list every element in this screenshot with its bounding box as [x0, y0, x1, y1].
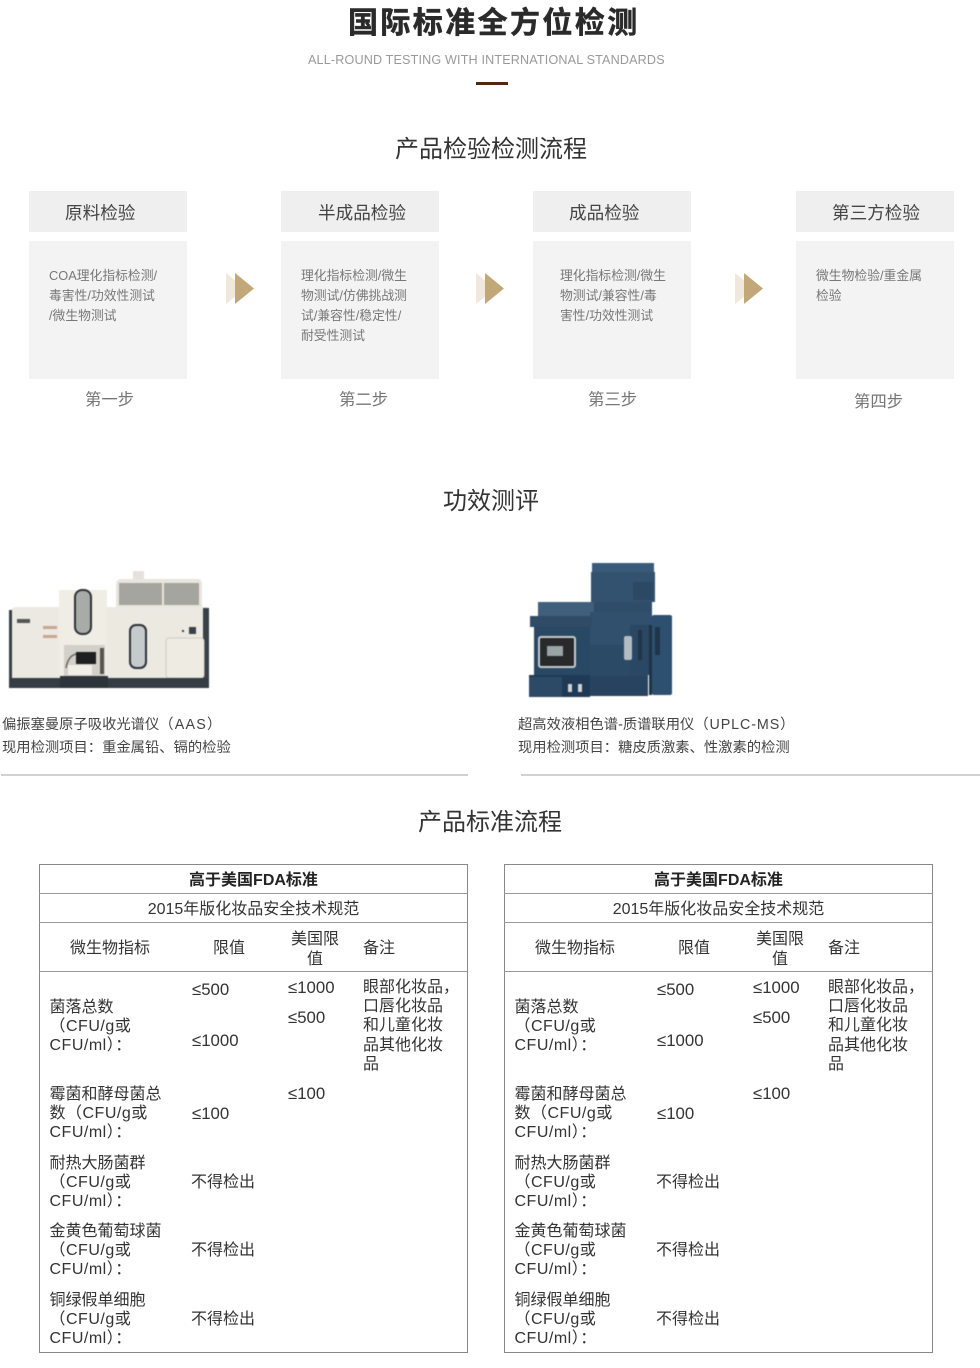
step 1 header [29, 191, 187, 232]
heading: efficacy evaluation: 功效测评 [443, 488, 539, 515]
table: right standards: 口唇化妆品 [828, 998, 908, 1015]
table: right standards: 值 [772, 951, 788, 968]
table: left standards: 备注 [363, 940, 395, 957]
table: right standards: 耐热大肠菌群 [514, 1155, 611, 1172]
table: left standards: 和儿童化妆 [363, 1017, 443, 1034]
arrow 1 [226, 273, 254, 304]
step 1 body: /微生物测试 [49, 308, 117, 323]
table: left standards: CFU/ml）： [50, 1330, 132, 1347]
table: left standards [39, 864, 468, 1353]
table: right standards: （CFU/g或 [514, 1242, 596, 1259]
step 2 body: 理化指标检测/微生 [301, 268, 407, 283]
table: left standards: 耐热大肠菌群 [50, 1155, 146, 1172]
table: left standards: 美国限 [291, 931, 339, 948]
step 3 body: 害性/功效性测试 [560, 308, 653, 323]
table: right standards: 霉菌和酵母菌总 [514, 1086, 627, 1103]
caption: AAS items: 现用检测项目：重金属铅、镉的检验 [2, 740, 231, 756]
table: right standards: 菌落总数 [514, 999, 579, 1016]
subtitle: ALL-ROUND TESTING WITH INTERNATIONAL STANDARDS [308, 53, 665, 67]
table: right standards: ≤1000 [657, 1031, 704, 1050]
table: left standards: CFU/ml）： [50, 1261, 132, 1278]
step 3 label: 第三步 [588, 391, 637, 409]
step 1 body: COA理化指标检测/ [49, 268, 157, 283]
table: left standards: 菌落总数 [50, 999, 114, 1016]
title accent bar [476, 82, 508, 85]
table: left standards: ≤100 [288, 1084, 325, 1103]
table: left standards: ≤1000 [192, 1031, 239, 1050]
table: left standards: CFU/ml）： [50, 1037, 132, 1054]
table: right standards: （CFU/g或 [514, 1174, 596, 1191]
caption: UPLC-MS: 超高效液相色谱-质谱联用仪（UPLC-MS） [518, 717, 795, 733]
caption: AAS: 偏振塞曼原子吸收光谱仪（AAS） [2, 717, 222, 733]
table: right standards: （CFU/g或 [514, 1018, 596, 1035]
table: left standards: ≤500 [192, 980, 229, 999]
table: left standards: 数（CFU/g或 [50, 1105, 148, 1122]
caption: UPLC-MS items: 现用检测项目：糖皮质激素、性激素的检测 [518, 740, 790, 756]
table: left standards: （CFU/g或 [50, 1018, 131, 1035]
table: right standards: 品 [828, 1056, 844, 1073]
step 4 body [796, 241, 954, 379]
table: left standards: ≤100 [192, 1104, 229, 1123]
table: left standards: （CFU/g或 [50, 1242, 131, 1259]
table: right standards: （CFU/g或 [514, 1311, 596, 1328]
table: left standards: 不得检出 [191, 1242, 255, 1259]
table: left standards: 值 [307, 951, 323, 968]
step 2 body: 物测试/仿佛挑战测 [301, 288, 407, 303]
table: right standards: ≤500 [753, 1008, 790, 1027]
arrow 2 [476, 273, 504, 304]
table: left standards: 霉菌和酵母菌总 [50, 1086, 162, 1103]
table: left standards: 高于美国FDA标准 [189, 872, 318, 889]
table: left standards: 口唇化妆品 [363, 998, 443, 1015]
step 2 body: 试/兼容性/稳定性/ [301, 308, 401, 323]
table: right standards: 限值 [678, 940, 710, 957]
table: right standards: 备注 [828, 940, 860, 957]
table: right standards: 2015年版化妆品安全技术规范 [613, 901, 824, 918]
step 2 header [281, 191, 439, 232]
table: left standards: 铜绿假单细胞 [50, 1292, 146, 1309]
table: right standards: 品其他化妆 [828, 1037, 908, 1054]
instrument photo: AAS [8, 570, 210, 689]
table: right standards: ≤100 [753, 1084, 790, 1103]
table: right standards: ≤1000 [753, 978, 800, 997]
table: right standards: 眼部化妆品， [828, 979, 924, 996]
table: right standards: 不得检出 [656, 1174, 720, 1191]
step 4 label: 第四步 [854, 393, 903, 411]
table: right standards: CFU/ml）： [514, 1193, 597, 1210]
table: left standards: 限值 [213, 940, 245, 957]
table: left standards: 微生物指标 [70, 940, 150, 957]
table: right standards: ≤100 [657, 1104, 694, 1123]
table: left standards: 眼部化妆品， [363, 979, 459, 996]
table: right standards: 和儿童化妆 [828, 1017, 908, 1034]
step 3 header [533, 191, 691, 232]
step 3 body: 理化指标检测/微生 [560, 268, 666, 283]
table: right standards: 美国限 [756, 931, 804, 948]
step 3 header: 成品检验 [569, 203, 639, 223]
step 4 body: 检验 [816, 288, 842, 303]
table: right standards: ≤500 [657, 980, 694, 999]
heading: standards process: 产品标准流程 [418, 809, 562, 836]
step 1 body [29, 241, 187, 379]
title: 国际标准全方位检测 [348, 7, 640, 40]
table: right standards: 数（CFU/g或 [514, 1105, 613, 1122]
table: right standards: 不得检出 [656, 1242, 720, 1259]
table: right standards: 高于美国FDA标准 [654, 872, 783, 889]
table: left standards: 不得检出 [191, 1311, 255, 1328]
table: left standards: CFU/ml）： [50, 1124, 132, 1141]
table: left standards: 2015年版化妆品安全技术规范 [148, 901, 359, 918]
step 3 body: 物测试/兼容性/毒 [560, 288, 657, 303]
heading: inspection process: 产品检验检测流程 [395, 136, 587, 163]
table: left standards: （CFU/g或 [50, 1311, 131, 1328]
step 4 header: 第三方检验 [832, 203, 920, 223]
step 2 body: 耐受性测试 [301, 328, 365, 343]
step 2 body [281, 241, 439, 379]
instrument photo: UPLC-MS [528, 562, 673, 698]
step 2 header: 半成品检验 [318, 203, 406, 223]
step 4 header [796, 191, 954, 232]
arrow 3 [735, 273, 763, 304]
table: right standards: CFU/ml）： [514, 1037, 597, 1054]
table: left standards: 不得检出 [191, 1174, 255, 1191]
table: left standards: （CFU/g或 [50, 1174, 131, 1191]
step 2 label: 第二步 [339, 391, 388, 409]
table: right standards: 铜绿假单细胞 [514, 1292, 611, 1309]
table: right standards: 不得检出 [656, 1311, 720, 1328]
step 3 body [533, 241, 691, 379]
step 1 body: 毒害性/功效性测试 [49, 288, 155, 303]
table: right standards: CFU/ml）： [514, 1330, 597, 1347]
step 1 header: 原料检验 [65, 203, 135, 223]
table: right standards [504, 864, 933, 1353]
table: left standards: ≤1000 [288, 978, 335, 997]
table: left standards: 金黄色葡萄球菌 [50, 1223, 162, 1240]
table: right standards: 金黄色葡萄球菌 [514, 1223, 627, 1240]
table: left standards: 品 [363, 1056, 379, 1073]
table: right standards: CFU/ml）： [514, 1124, 597, 1141]
table: right standards: CFU/ml）： [514, 1261, 597, 1278]
table: right standards: 微生物指标 [535, 940, 615, 957]
table: left standards: 品其他化妆 [363, 1037, 443, 1054]
table: left standards: ≤500 [288, 1008, 325, 1027]
table: left standards: CFU/ml）： [50, 1193, 132, 1210]
step 1 label: 第一步 [85, 391, 134, 409]
step 4 body: 微生物检验/重金属 [816, 268, 922, 283]
